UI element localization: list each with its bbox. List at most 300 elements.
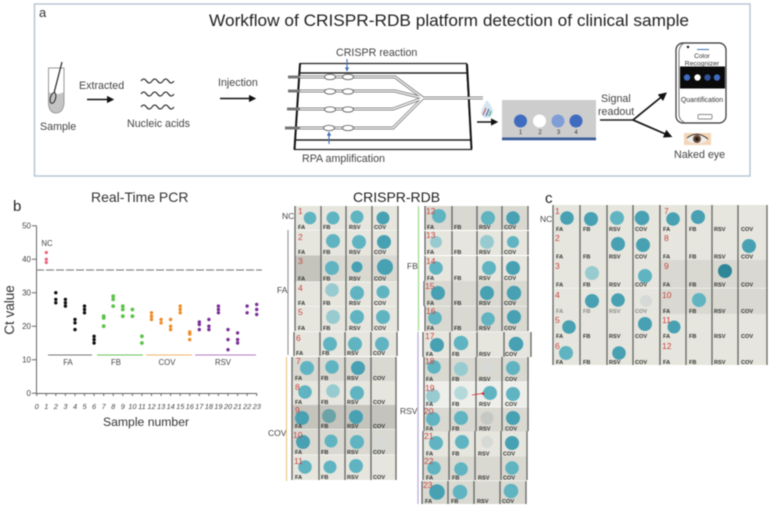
group labels xyxy=(63,358,232,367)
strip 19 xyxy=(424,382,529,408)
group labels and bars: NC xyxy=(282,211,294,221)
strip 15 xyxy=(424,281,528,307)
arrow: CRISPR reaction pointer xyxy=(346,59,348,70)
c strip 8: RSV xyxy=(714,254,726,260)
strip 15: 15 xyxy=(425,281,435,291)
group labels and bars: RSV xyxy=(400,406,418,416)
strip 5 xyxy=(295,306,398,332)
strip 11: 11 xyxy=(294,456,303,466)
x axis tick labels: 16 xyxy=(186,402,195,411)
strip 12: RSV xyxy=(479,225,491,231)
strip 2: COV xyxy=(374,250,386,256)
group labels and bars: FB xyxy=(407,261,418,271)
strip 13: FA xyxy=(427,250,434,256)
strip 17: FB xyxy=(452,352,459,358)
y axis tick labels: 30 xyxy=(22,288,32,298)
arrow: droplet to card xyxy=(477,121,496,123)
sample label: Sample xyxy=(40,121,76,133)
c strip 5: FB xyxy=(583,334,590,340)
strip 15: RSV xyxy=(479,301,491,307)
c strip 7: RSV xyxy=(714,227,726,233)
c strip 12: FB xyxy=(689,360,696,366)
strip 23: FB xyxy=(451,499,458,505)
strip 9: FA xyxy=(295,424,302,430)
c strip 9: COV xyxy=(741,282,753,288)
strip 4: COV xyxy=(374,301,386,307)
strip 1: 1 xyxy=(298,206,303,216)
c strip 1 xyxy=(553,205,660,233)
strip 20 xyxy=(424,406,529,432)
c strip 9 xyxy=(660,260,767,288)
dots: FB xyxy=(102,294,144,345)
icon: smartphone: Quantification xyxy=(681,97,723,104)
strip 10: RSV xyxy=(347,450,359,456)
detection card: 4 xyxy=(574,130,578,136)
strip 10: COV xyxy=(373,450,385,456)
strip 20: 20 xyxy=(424,406,434,416)
strip 14: 14 xyxy=(426,256,436,266)
c strip 4: RSV xyxy=(609,309,621,315)
c strip 7: 7 xyxy=(664,206,669,216)
c strip 12 xyxy=(660,339,767,366)
group brackets xyxy=(48,354,256,356)
c strip 10: COV xyxy=(741,309,753,315)
strip 7: FB xyxy=(321,376,328,382)
naked eye label: Naked eye xyxy=(674,149,725,161)
c strip 11: FA xyxy=(663,334,670,340)
c strip 1: RSV xyxy=(609,227,621,233)
c strip 2: FA xyxy=(556,254,563,260)
c strip 8: COV xyxy=(741,254,753,260)
strip 4: RSV xyxy=(349,301,361,307)
strip 3: RSV xyxy=(349,276,361,282)
strip 23: RSV xyxy=(477,499,489,505)
strip 12: FB xyxy=(454,225,461,231)
c strip 6: 6 xyxy=(555,341,560,351)
heading: CRISPR-RDB: CRISPR-RDB xyxy=(353,189,440,205)
strip 6: RSV xyxy=(347,351,359,357)
strip 18: FB xyxy=(452,377,459,383)
strip 23: FA xyxy=(425,499,432,505)
x axis tick labels: 9 xyxy=(121,402,125,411)
x axis tick labels: 15 xyxy=(176,402,185,411)
c strip 6: FA xyxy=(556,360,563,366)
c strip 8: 8 xyxy=(664,233,669,243)
c strip 9: FA xyxy=(663,282,670,288)
x axis tick labels: 8 xyxy=(111,402,116,411)
c strip 2: RSV xyxy=(609,254,621,260)
strip 4: FB xyxy=(323,301,330,307)
y axis tick labels: 20 xyxy=(22,322,32,331)
strip 21 xyxy=(423,431,527,458)
x axis tick labels xyxy=(35,402,262,411)
strip 10: FA xyxy=(295,450,302,456)
strip 19: FA xyxy=(426,402,433,408)
strip 7 xyxy=(292,356,396,382)
strip 18 xyxy=(424,356,529,383)
panel b label: b xyxy=(13,198,21,215)
strip 3 xyxy=(295,255,398,282)
strip 6: FB xyxy=(322,351,329,357)
x axis title: Sample number xyxy=(103,415,189,429)
strip 18: FA xyxy=(426,377,433,383)
strip 1: RSV xyxy=(349,225,361,231)
strip 7: FA xyxy=(295,376,302,382)
strip 15: FB xyxy=(454,301,461,307)
strip 7: COV xyxy=(373,376,385,382)
x axis tick labels: 3 xyxy=(63,402,68,411)
strip 16: 16 xyxy=(426,306,436,316)
CRISPR reaction label: CRISPR reaction xyxy=(336,47,417,59)
strip 4: FA xyxy=(298,301,305,307)
microfluidic chip xyxy=(285,64,483,150)
y axis tick labels xyxy=(22,222,32,398)
icon: smartphone: Recognizer xyxy=(685,60,720,68)
dots: FA xyxy=(54,291,96,345)
c strip 3: FA xyxy=(556,282,563,288)
y axis title: Ct value xyxy=(2,285,17,335)
strip 13: RSV xyxy=(479,250,491,256)
signal readout label: Signal xyxy=(601,93,631,105)
strip 1 xyxy=(295,206,398,231)
arrow: injection xyxy=(220,98,254,100)
c strip 4 xyxy=(553,288,660,315)
c strip 3 xyxy=(553,260,660,288)
strip 9: FB xyxy=(321,424,328,430)
x axis tick labels: 13 xyxy=(157,402,166,411)
c strip 2: COV xyxy=(635,254,647,260)
c strip 1: 1 xyxy=(555,206,560,216)
c strip 5 xyxy=(553,314,660,340)
strip 8: FA xyxy=(295,400,302,406)
x axis tick labels: 12 xyxy=(147,402,156,411)
c strip 3: 3 xyxy=(555,261,560,271)
strip 14: FB xyxy=(454,276,461,282)
c strip 12: 12 xyxy=(662,341,672,351)
strip 23 xyxy=(422,480,526,505)
strip 23: 23 xyxy=(423,480,433,490)
group labels: FA xyxy=(63,358,74,367)
strip 16: RSV xyxy=(479,326,491,332)
strip 22: COV xyxy=(503,476,515,482)
strip 8 xyxy=(292,381,396,406)
detection card xyxy=(502,100,596,140)
x axis tick labels: 1 xyxy=(44,402,48,411)
strip 10: 10 xyxy=(293,430,303,440)
strip 22: RSV xyxy=(478,476,490,482)
x axis tick labels: 5 xyxy=(82,402,87,411)
arrow: RPA pointer xyxy=(328,133,330,144)
strip 9 xyxy=(292,405,396,430)
strip 12: 12 xyxy=(426,206,436,216)
c strip 12: FA xyxy=(663,360,670,366)
strip 13: FB xyxy=(454,250,461,256)
x axis tick labels: 14 xyxy=(166,402,175,411)
c strip 4: FB xyxy=(583,309,590,315)
strip 6: 6 xyxy=(296,333,301,343)
strip 11: RSV xyxy=(347,475,359,481)
strip 11: COV xyxy=(373,475,385,481)
c strip 7: FB xyxy=(689,227,696,233)
x axis tick labels: 11 xyxy=(138,402,146,411)
threshold line xyxy=(36,269,262,271)
extracted label: Extracted xyxy=(79,80,124,92)
strip 3: FB xyxy=(323,276,330,282)
strip 8: 8 xyxy=(295,382,300,392)
y axis tick labels: 10 xyxy=(22,356,32,364)
strip 2: 2 xyxy=(298,232,303,242)
y axis tick labels: 40 xyxy=(22,255,32,264)
c strip 8: FB xyxy=(689,254,696,260)
x axis tick labels: 21 xyxy=(232,402,242,411)
c strip 6: COV xyxy=(635,360,647,366)
c strip 4: FA xyxy=(556,309,563,315)
y axis tick labels: 0 xyxy=(27,389,32,398)
strip 2: FB xyxy=(323,250,330,256)
strip 1: FB xyxy=(323,225,330,231)
strip 20: RSV xyxy=(479,426,491,432)
RPA amplification label: RPA amplification xyxy=(302,153,385,165)
strip 1: FA xyxy=(298,225,305,231)
strip 21: RSV xyxy=(478,452,490,458)
icon: smartphone xyxy=(676,43,726,123)
strip 22: FB xyxy=(452,476,459,482)
c strip 1: FB xyxy=(583,227,590,233)
strip 21: COV xyxy=(503,452,515,458)
strip 16: COV xyxy=(504,326,516,332)
x axis tick labels: 17 xyxy=(195,402,204,411)
c strip 2: FB xyxy=(583,254,590,260)
c strip 12: RSV xyxy=(714,360,726,366)
strip 22: FA xyxy=(426,476,433,482)
strip 19: FB xyxy=(452,402,459,408)
c strip 10: FA xyxy=(663,309,670,315)
strip 4: 4 xyxy=(298,283,303,293)
strip 3: COV xyxy=(374,276,386,282)
c strip 9: 9 xyxy=(664,261,669,271)
c strip 12: COV xyxy=(741,360,753,366)
x axis tick labels: 22 xyxy=(242,402,251,411)
x axis tick labels: 0 xyxy=(35,402,40,411)
injection label: Injection xyxy=(218,77,258,89)
group labels and bars xyxy=(268,206,418,504)
c strip 5: 5 xyxy=(555,315,560,325)
x axis tick labels: 2 xyxy=(53,402,58,411)
strip 17: COV xyxy=(505,352,517,358)
x axis tick labels: 7 xyxy=(102,402,107,411)
strip 3: FA xyxy=(298,276,305,282)
icon: droplet xyxy=(481,100,493,118)
detection card: 3 xyxy=(557,130,561,136)
strip 22: 22 xyxy=(424,456,434,466)
panel c: clinical strips xyxy=(553,205,767,366)
arrows: signal readout split xyxy=(600,94,670,136)
c strip 1: FA xyxy=(556,227,563,233)
c strip 7 xyxy=(660,205,767,233)
strip 18: COV xyxy=(505,377,517,383)
strip 12: COV xyxy=(504,225,516,231)
detection card: 1 xyxy=(519,130,523,136)
icon: nucleic acid waves xyxy=(141,79,174,109)
y axis tick labels: 50 xyxy=(22,222,32,230)
c strip 10 xyxy=(660,288,767,315)
group labels: RSV xyxy=(215,358,232,367)
strip 19: 19 xyxy=(425,383,435,393)
strip 17: 17 xyxy=(425,331,435,341)
c strip 11: RSV xyxy=(714,334,726,340)
c strip 7: FA xyxy=(663,227,670,233)
c strip 11: 11 xyxy=(662,315,671,325)
strip 16: FA xyxy=(427,326,434,332)
panel c label: c xyxy=(545,190,553,207)
panel: CRISPR-RDB strips xyxy=(268,206,531,505)
strip 21: 21 xyxy=(424,431,434,441)
c strip 11 xyxy=(660,314,767,340)
c strip 1: COV xyxy=(635,227,647,233)
strip 18: 18 xyxy=(425,356,435,366)
c strip 6: FB xyxy=(583,360,590,366)
c strip 3: COV xyxy=(635,282,647,288)
strip 2: FA xyxy=(298,250,305,256)
strip 15: FA xyxy=(427,301,434,307)
strip 17: FA xyxy=(426,352,433,358)
strip 6 xyxy=(294,332,397,357)
strip 5: FB xyxy=(323,326,330,332)
dots: NC xyxy=(45,251,48,264)
strip 9: RSV xyxy=(347,424,359,430)
strip 12: FA xyxy=(427,225,434,231)
strip 8: RSV xyxy=(347,400,359,406)
strip 10 xyxy=(292,429,396,456)
strip 19: RSV xyxy=(479,402,491,408)
c strip 2 xyxy=(553,232,660,260)
strip 22 xyxy=(423,456,527,482)
strip 9: COV xyxy=(373,424,385,430)
strip 23: COV xyxy=(502,499,514,505)
group labels: COV xyxy=(159,358,176,367)
signal readout label: readout xyxy=(598,106,634,118)
x axis tick labels: 18 xyxy=(205,402,214,411)
strip 1: COV xyxy=(374,225,386,231)
strip 5: FA xyxy=(298,326,305,332)
c strip 6: RSV xyxy=(609,360,621,366)
strip 14: RSV xyxy=(479,276,491,282)
strip 8: FB xyxy=(321,400,328,406)
x axis tick labels: 4 xyxy=(73,402,77,411)
strip 21: FB xyxy=(452,452,459,458)
strip 14: FA xyxy=(427,276,434,282)
strip 20: FB xyxy=(452,426,459,432)
c strip 11: FB xyxy=(689,334,696,340)
c strip 10: 10 xyxy=(662,290,672,300)
c strip 3: FB xyxy=(583,282,590,288)
x axis tick labels: 20 xyxy=(223,402,233,411)
strip 14 xyxy=(425,256,528,282)
c strip 10: FB xyxy=(689,309,696,315)
c strip 4: 4 xyxy=(555,290,560,300)
c strip 11: COV xyxy=(741,334,753,340)
strip 10: FB xyxy=(321,450,328,456)
group labels and bars: FA xyxy=(277,285,288,295)
heading: Real-Time PCR: Real-Time PCR xyxy=(91,189,188,205)
strip 7: RSV xyxy=(347,376,359,382)
strip 11: FA xyxy=(295,475,302,481)
c strip 9: FB xyxy=(689,282,696,288)
strip 9: 9 xyxy=(295,405,300,415)
x axis tick labels: 10 xyxy=(128,402,137,411)
strip 14: COV xyxy=(504,276,516,282)
dots: COV xyxy=(150,304,191,341)
x axis tick labels: 6 xyxy=(92,402,97,411)
strip 11: FB xyxy=(321,475,328,481)
panel a: workflow xyxy=(34,4,750,176)
strip 6: COV xyxy=(373,351,385,357)
strip 2: RSV xyxy=(349,250,361,256)
c strip 10: RSV xyxy=(714,309,726,315)
strip 20: FA xyxy=(426,426,433,432)
strip 16 xyxy=(425,306,528,332)
strip 13: COV xyxy=(504,250,516,256)
strip 13: 13 xyxy=(426,230,436,240)
strip 12 xyxy=(425,206,528,231)
strip 4 xyxy=(295,282,398,307)
strip 2 xyxy=(295,230,398,256)
strip 3: 3 xyxy=(298,256,303,266)
strip 18: RSV xyxy=(479,377,491,383)
strip 15: COV xyxy=(504,301,516,307)
title: Workflow of CRISPR-RDB platform detection of clinical sample xyxy=(209,12,689,30)
c strip 9: RSV xyxy=(714,282,726,288)
x axis tick labels: 23 xyxy=(252,402,262,411)
c strip 5: COV xyxy=(635,334,647,340)
strip 21: FA xyxy=(426,452,433,458)
strip 5: 5 xyxy=(298,307,303,317)
arrow: extracted xyxy=(87,98,112,100)
strip 13 xyxy=(425,230,528,256)
strip 20: COV xyxy=(505,426,517,432)
panel label a: a xyxy=(39,5,47,20)
group labels and bars: COV xyxy=(268,428,287,438)
c strip 7: COV xyxy=(741,227,753,233)
strip 19: COV xyxy=(505,402,517,408)
icon: eye xyxy=(684,133,711,145)
strip 7: 7 xyxy=(296,356,301,366)
c strip 6 xyxy=(553,339,660,366)
x axis tick labels: 19 xyxy=(214,402,223,411)
detection card: 2 xyxy=(538,130,542,136)
c strip 4: COV xyxy=(635,309,647,315)
c strip 8: FA xyxy=(663,254,670,260)
nucleic acids label: Nucleic acids xyxy=(127,118,190,130)
c strip 8 xyxy=(660,232,767,260)
strip 6: FA xyxy=(296,351,303,357)
strip 8: COV xyxy=(373,400,385,406)
c strip 5: FA xyxy=(556,334,563,340)
icon: smartphone: Color xyxy=(694,53,711,60)
axes xyxy=(32,226,257,396)
c strip 2: 2 xyxy=(555,233,560,243)
strip 5: RSV xyxy=(349,326,361,332)
strip 11 xyxy=(292,455,396,481)
NC label: NC xyxy=(41,239,53,248)
strip 5: COV xyxy=(374,326,386,332)
NC label panel c: NC xyxy=(540,214,552,224)
dots: RSV xyxy=(198,303,258,351)
icon: sample tube xyxy=(48,62,64,113)
c strip 5: RSV xyxy=(609,334,621,340)
chart: real-time PCR dot plot xyxy=(2,222,262,429)
strip 17 xyxy=(423,331,531,358)
